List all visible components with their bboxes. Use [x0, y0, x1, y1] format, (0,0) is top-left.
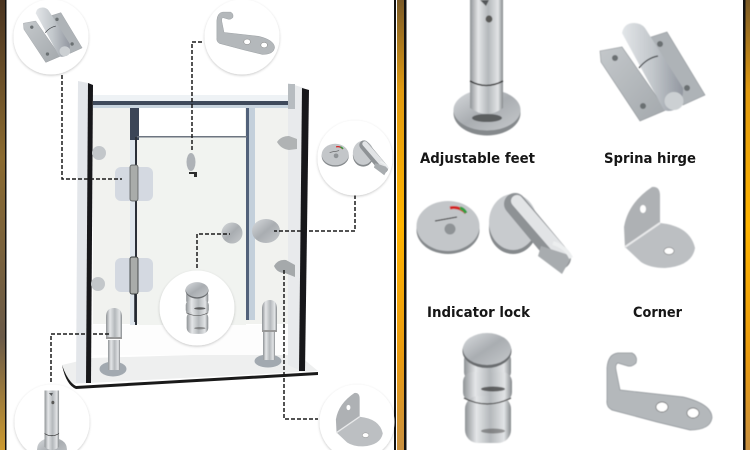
- part: corner: [624, 187, 695, 321]
- icon: hinge: [600, 23, 705, 121]
- label: adjustable feet: Adjustable feet: [420, 151, 535, 167]
- icon: knob: [462, 333, 512, 443]
- dashed connector: hook: [192, 42, 202, 150]
- wall brackets: [91, 136, 297, 291]
- small hook on door: [186, 153, 197, 177]
- right support leg: [254, 300, 282, 368]
- dashed connector: corner: [284, 270, 318, 419]
- callout: corner: [320, 384, 394, 450]
- partition base: [62, 352, 318, 389]
- callout: hook: [204, 0, 280, 74]
- label: corner: Corner: [633, 305, 682, 321]
- door lock discs: [222, 219, 280, 244]
- door hinges: [115, 165, 153, 322]
- door posts: [130, 108, 255, 325]
- callout: indicator lock: [318, 120, 392, 196]
- icon: foot: [454, 0, 520, 136]
- callout: knob: [160, 270, 234, 346]
- left support leg: [100, 308, 126, 376]
- dashed connector: lock: [274, 195, 355, 231]
- panel: partition diagram: [62, 81, 318, 389]
- dashed connector: hinge: [62, 75, 122, 179]
- label: indicator lock: Indicator lock: [427, 305, 531, 321]
- icon: corner: [624, 187, 695, 268]
- part: adjustable feet: [420, 0, 535, 167]
- icon: hook: [607, 353, 712, 430]
- part: indicator lock: [416, 194, 572, 321]
- right side panel: [288, 83, 309, 371]
- panel: parts list: [416, 0, 712, 443]
- label: spring hinge: Sprina hirge: [604, 151, 696, 167]
- left side panel: [76, 81, 93, 383]
- icon: indicator lock: [416, 194, 572, 274]
- top rail: [93, 95, 296, 108]
- partition back panels: [93, 108, 295, 355]
- part: spring hinge: [600, 23, 705, 167]
- callout: hinge: [14, 0, 88, 74]
- callout: foot: [14, 384, 90, 450]
- dashed connector: knob: [197, 234, 230, 268]
- dashed connector: foot: [51, 334, 110, 382]
